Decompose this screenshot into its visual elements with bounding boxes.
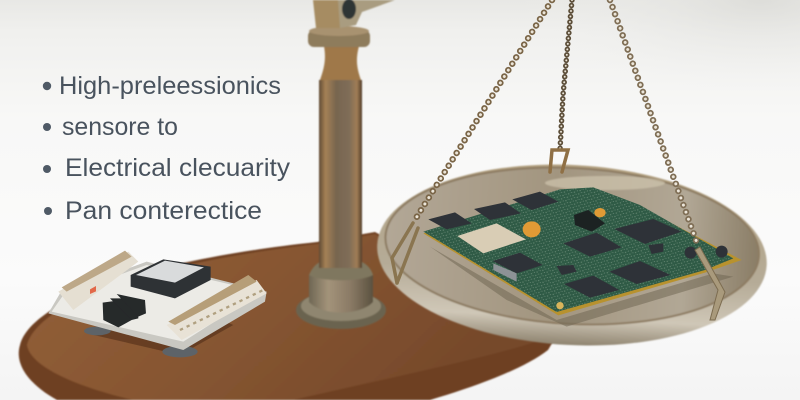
board shadow xyxy=(430,247,733,327)
bullet 1: High-preleessionics xyxy=(59,72,281,100)
column collar xyxy=(308,26,370,47)
scale chains xyxy=(392,0,725,320)
bullet 4: Pan conterectice xyxy=(65,197,262,225)
scale pan xyxy=(373,155,771,355)
large circuit board in pan xyxy=(423,187,742,327)
column neck xyxy=(320,46,361,80)
column foot xyxy=(296,262,386,329)
right bracket xyxy=(695,247,725,320)
left terminal strip xyxy=(58,251,138,310)
small circuit board on base xyxy=(48,251,267,357)
wooden base xyxy=(19,232,560,400)
pan inner xyxy=(381,158,763,334)
bullet 2: sensore to xyxy=(62,113,178,141)
right chain xyxy=(610,0,697,243)
metal shield xyxy=(457,223,526,253)
left chain xyxy=(413,0,552,223)
chips xyxy=(428,192,728,298)
board feet xyxy=(84,327,198,357)
left bracket xyxy=(392,223,418,283)
middle hook xyxy=(550,150,568,172)
right terminal strip xyxy=(167,275,267,340)
column shaft xyxy=(319,80,362,268)
pivot block and arm xyxy=(313,0,395,28)
middle chain xyxy=(560,0,572,150)
orange capacitors xyxy=(523,208,606,309)
board plate xyxy=(48,262,267,350)
pan top highlight xyxy=(545,176,665,190)
board shadow xyxy=(87,310,233,355)
scale column xyxy=(296,0,395,329)
processor chip xyxy=(131,259,211,298)
heat sink xyxy=(103,294,146,327)
pan outer xyxy=(373,155,771,355)
board body xyxy=(423,187,742,315)
bullet 3: Electrical clecuarity xyxy=(65,154,291,182)
bullet list xyxy=(43,72,291,225)
